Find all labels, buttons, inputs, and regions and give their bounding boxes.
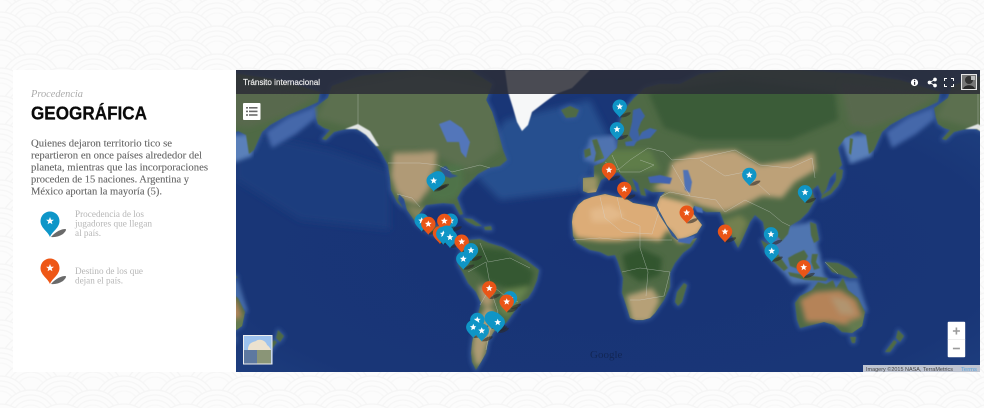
map pin: orange, Bolivia: [482, 281, 500, 299]
legend text: orange pin: Destino de los que: [75, 267, 143, 277]
map pin: blue, Mexico: [414, 214, 428, 232]
map pin: blue, Denmark: [610, 122, 628, 140]
map pin: orange, Guatemala: [437, 214, 456, 230]
map pin: blue, Ecuador: [456, 252, 474, 270]
map pin: blue, Malaysia: [764, 244, 783, 262]
legend icon: blue pin: [40, 212, 66, 237]
attribution bar: Imagery ©2015 NASA, TerraMetrics: [866, 366, 953, 373]
Google watermark: Google: [590, 349, 622, 361]
map pin: blue, Thailand: [764, 227, 782, 245]
panel: world map: [236, 70, 980, 372]
map pin: blue, Argentina east 2: [487, 312, 505, 330]
map pin: blue, United States (back): [434, 171, 449, 189]
map pin: orange, Indonesia: [796, 260, 815, 278]
legend text: blue pin: Procedencia de los: [75, 210, 144, 220]
map pin: orange, Nicaragua: [432, 226, 446, 244]
map pin: orange, Italy: [617, 182, 635, 200]
heading: GEOGRÁFICA: GEOGRÁFICA: [31, 102, 147, 124]
legend text: blue pin: [74, 210, 152, 239]
basemap thumbnail: [243, 335, 272, 364]
map pin: blue, Argentina north: [470, 312, 488, 327]
legend text: blue pin: jugadores que llegan: [74, 220, 152, 230]
intro paragraph: proceden de 15 naciones. Argentina y: [31, 174, 190, 186]
map pin: orange, Mexico: [421, 216, 436, 235]
legend text: orange pin: [75, 267, 143, 286]
map pin: blue, United States (middle): [431, 172, 447, 190]
map pin: blue, Nicaragua: [442, 226, 454, 232]
map pin: blue, Norway: [612, 100, 631, 118]
icon: fullscreen: [944, 78, 954, 86]
map pin: blue, Paraguay: [503, 291, 521, 309]
intro paragraph: repartieron en once países alrededor del: [31, 150, 202, 162]
map pin: orange, Spain: [602, 163, 620, 181]
legend text: blue pin: al país.: [75, 229, 101, 239]
map pin: orange, India: [718, 224, 736, 242]
north Atlantic and north Pacific lighter water: [470, 100, 610, 200]
map pin: blue, Argentina east 4: [492, 316, 509, 333]
map pin: blue, Panama: [442, 231, 457, 248]
map pin: blue, Argentina west: [474, 324, 493, 342]
attribution bar: Terms: [961, 367, 977, 373]
icon: info: [911, 79, 918, 86]
map pin: blue, China: [798, 185, 816, 203]
map pin: blue, Colombia: [464, 243, 482, 261]
map pin: blue, Argentina east 3: [491, 314, 507, 332]
map pin: blue, Costa Rica: [436, 226, 448, 245]
intro paragraph: Quienes dejaron territorio tico se: [31, 138, 172, 150]
kicker: Procedencia: Procedencia: [30, 88, 83, 100]
attribution bar: [863, 365, 980, 373]
map pin: blue, Honduras: [447, 214, 462, 232]
map pin: blue, United States (front): [426, 174, 445, 192]
intro paragraph: [31, 138, 208, 198]
zoom control: [948, 322, 965, 357]
intro paragraph: México aportan la mayoría (5).: [31, 186, 162, 198]
panel: text and legend: [13, 70, 236, 372]
map pin: orange, Brazil: [500, 294, 518, 312]
list button: [243, 103, 260, 120]
avatar: [961, 74, 977, 90]
legend text: orange pin: dejan el país.: [75, 276, 123, 286]
map pin: orange, Colombia: [454, 234, 469, 252]
map header bar: [236, 70, 980, 94]
icon: share: [928, 78, 936, 87]
intro paragraph: planeta, mientras que las incorporaciones: [31, 162, 208, 174]
map title: Tránsito internacional: [243, 77, 320, 87]
map pin: blue, Chile: [466, 320, 479, 338]
map pin: blue, Central Asia: [742, 168, 760, 186]
map pin: blue, Argentina east 1: [484, 311, 496, 329]
world landmasses: [236, 70, 980, 372]
legend icon: orange pin: [40, 258, 66, 284]
map pin: orange, Arabia: [680, 206, 698, 224]
